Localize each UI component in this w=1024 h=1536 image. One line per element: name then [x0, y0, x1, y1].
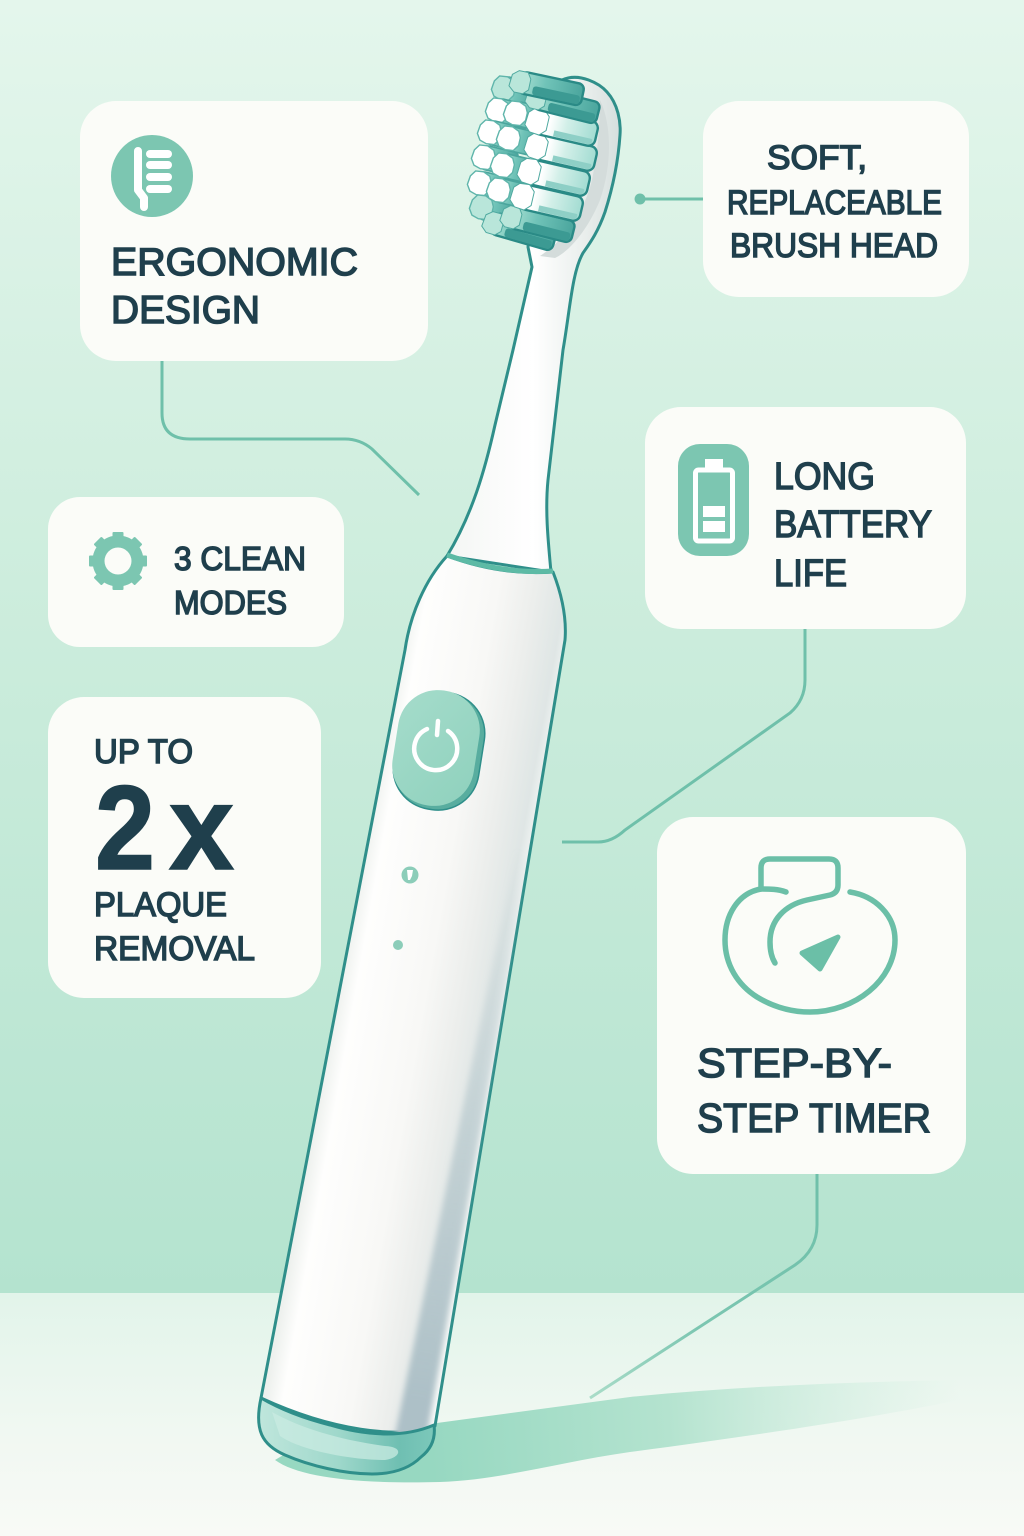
toothbrush cast shadow [275, 1380, 960, 1482]
indicator light 2 [393, 940, 403, 950]
heading: soft replaceable brush head: SOFT, [767, 139, 867, 177]
panel: clean modes [48, 497, 344, 647]
toothbrush body [261, 556, 565, 1432]
toothbrush [259, 69, 620, 1474]
icon: gear [89, 532, 147, 590]
power button [386, 684, 491, 816]
heading: long battery life [774, 456, 932, 595]
heading: step-by-step timer: STEP-BY- [697, 1040, 892, 1086]
heading: step-by-step timer: STEP TIMER [697, 1095, 931, 1141]
icon: battery [678, 444, 749, 556]
toothbrush neck and head [447, 77, 620, 572]
panel: step timer [657, 817, 966, 1174]
heading: 3 clean modes: MODES [174, 584, 287, 621]
heading: long battery life: BATTERY [774, 504, 932, 546]
heading: long battery life: LONG [774, 456, 875, 498]
head inner shading [540, 100, 609, 258]
collar ring [447, 555, 553, 572]
stat: 2x: 2 [95, 761, 155, 895]
heading: soft replaceable brush head [727, 139, 942, 265]
heading: 3 clean modes: 3 CLEAN [174, 540, 306, 577]
panel: ergonomic design [80, 101, 428, 361]
stat: 2x: x [169, 761, 234, 895]
body shaded band [392, 900, 521, 1432]
heading: 3 clean modes [174, 540, 306, 621]
floor surface [0, 1293, 1024, 1536]
heading: ergonomic design: ERGONOMIC [111, 241, 358, 284]
bristles [466, 69, 601, 251]
label: plaque removal: PLAQUE [94, 886, 227, 924]
icon: timer [725, 859, 895, 1012]
heading: ergonomic design [111, 241, 358, 332]
heading: soft replaceable brush head: REPLACEABLE [727, 184, 942, 222]
connector: battery [562, 629, 805, 842]
heading: step-by-step timer [697, 1040, 931, 1141]
panel: brush head [703, 101, 969, 297]
panel: plaque removal [48, 697, 321, 998]
label: up to: UP TO [94, 733, 193, 771]
connector: timer [590, 1174, 817, 1398]
heading: ergonomic design: DESIGN [111, 289, 260, 332]
label: plaque removal: REMOVAL [94, 930, 255, 968]
connector: brush head [634, 194, 704, 204]
panel: battery life [645, 407, 966, 629]
connector: ergonomic design [162, 361, 419, 495]
label: plaque removal [94, 886, 255, 968]
heading: soft replaceable brush head: BRUSH HEAD [730, 227, 938, 265]
icon: toothbrush badge [111, 135, 193, 217]
stat: 2x [95, 761, 234, 895]
indicator light 1 [402, 866, 418, 884]
base cap [259, 1398, 434, 1474]
heading: long battery life: LIFE [774, 553, 847, 595]
